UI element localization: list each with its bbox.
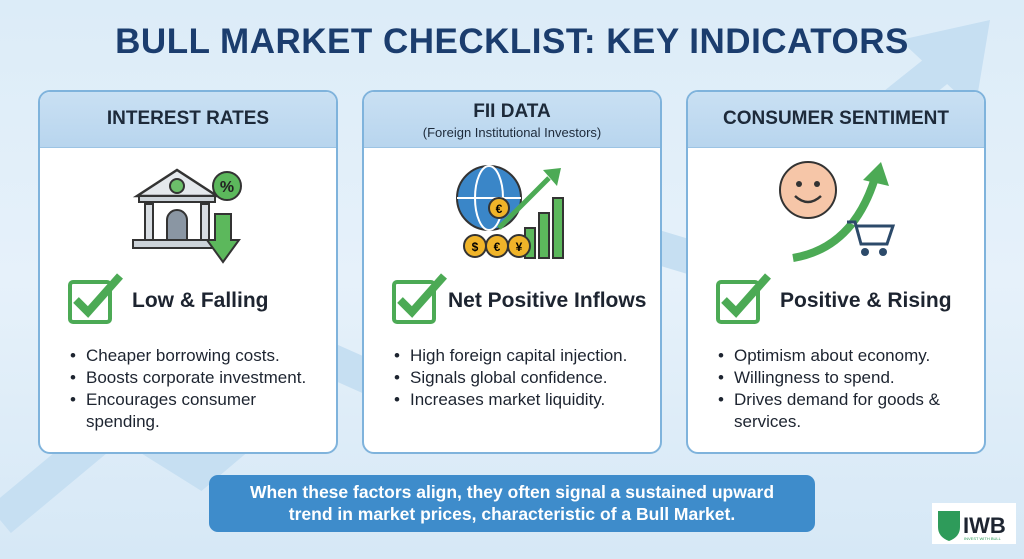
bullets: High foreign capital injection. xyxy=(410,346,627,365)
bullets: Willingness to spend. xyxy=(734,368,895,387)
bullets xyxy=(394,346,627,409)
callout banner: When these factors align, they often signal a sustained upward xyxy=(250,482,774,502)
check: positive & rising xyxy=(716,274,952,324)
bullets: Optimism about economy. xyxy=(734,346,930,365)
check: net positive inflows xyxy=(392,274,646,324)
bullets xyxy=(718,346,940,431)
callout banner: trend in market prices, characteristic of a Bull Market. xyxy=(289,504,735,524)
logo: IWB xyxy=(932,503,1016,544)
icon: globe with coins and bars: $ xyxy=(472,240,479,254)
panel: consumer sentiment xyxy=(686,90,986,454)
check: net positive inflows: Net Positive Inflows xyxy=(448,289,646,312)
heading: FII DATA xyxy=(473,101,551,122)
check: low & falling: Low & Falling xyxy=(132,289,268,312)
heading: INTEREST RATES xyxy=(107,108,269,129)
logo: IWB: IWB xyxy=(963,513,1006,538)
panel: FII data xyxy=(362,90,662,454)
bullets: Boosts corporate investment. xyxy=(86,368,306,387)
heading: (Foreign Institutional Investors) xyxy=(423,125,601,140)
check: positive & rising: Positive & Rising xyxy=(780,289,952,312)
bullets: Drives demand for goods & services. xyxy=(734,390,940,431)
bullets: Cheaper borrowing costs. xyxy=(86,346,280,365)
icon: bank with falling rate xyxy=(132,168,242,264)
icon: globe with coins and bars xyxy=(456,165,564,259)
heading: CONSUMER SENTIMENT xyxy=(723,108,949,129)
icon: bank with falling rate: % xyxy=(220,179,234,196)
heading xyxy=(688,92,984,148)
icon: globe with coins and bars: ¥ xyxy=(516,240,523,254)
logo: IWB: INVEST WITH BULL xyxy=(964,536,1002,541)
bullets xyxy=(70,346,306,431)
icon: globe with coins and bars: € xyxy=(494,240,501,254)
panel: interest rates xyxy=(38,90,338,454)
bullets: Increases market liquidity. xyxy=(410,390,605,409)
bullets: Encourages consumer spending. xyxy=(86,390,256,431)
callout banner xyxy=(209,475,815,532)
heading xyxy=(364,92,660,148)
check: low & falling xyxy=(68,274,268,324)
bullets: Signals global confidence. xyxy=(410,368,608,387)
heading xyxy=(40,92,336,148)
icon: smiley with cart xyxy=(779,161,895,262)
title: BULL MARKET CHECKLIST: KEY INDICATORS xyxy=(115,22,909,61)
icon: globe with coins and bars: € xyxy=(496,202,503,216)
